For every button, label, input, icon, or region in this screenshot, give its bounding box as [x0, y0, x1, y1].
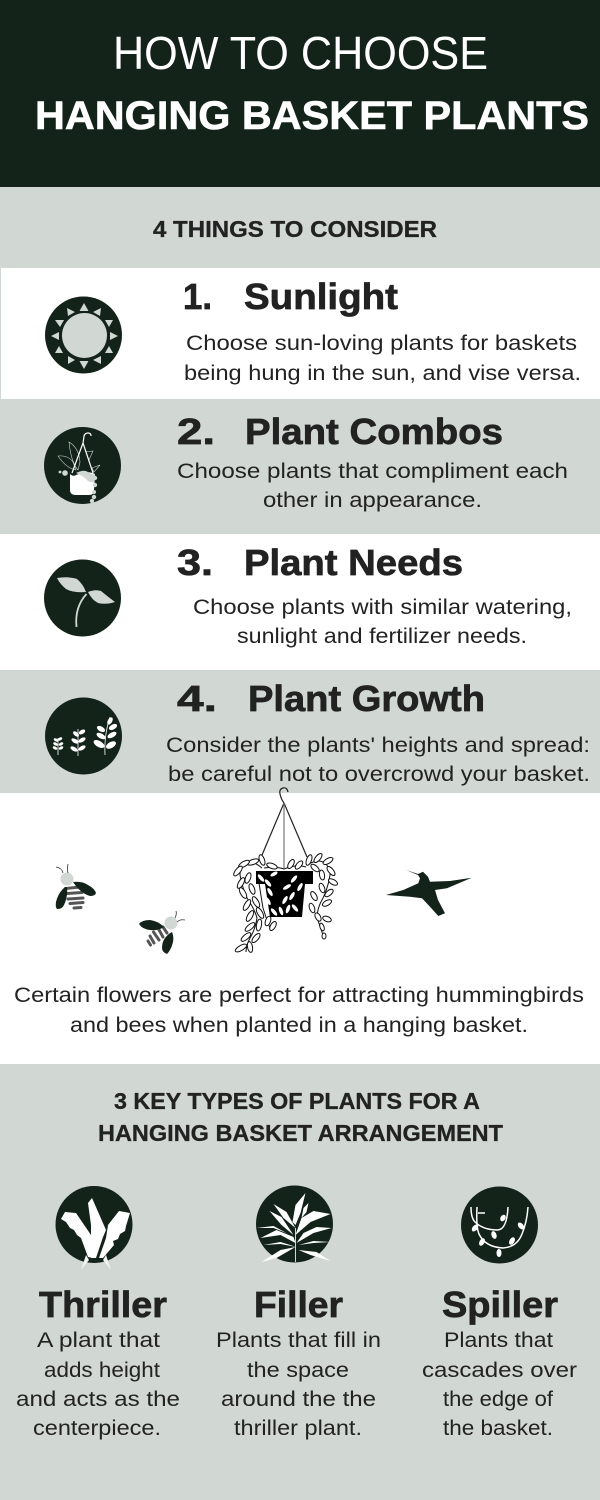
icon: vines: [461, 1186, 538, 1264]
trailing leaves: [232, 852, 339, 953]
column: spiller: [422, 1186, 577, 1440]
number 4: 4.: [177, 678, 217, 719]
column: filler: [216, 1186, 381, 1440]
panel: 3 plant needs: [0, 534, 600, 670]
heading: 3 key types: [98, 1088, 503, 1146]
text: plant needs body: [193, 596, 572, 648]
pot: [256, 871, 313, 917]
text: plant growth body: be careful not to overcrowd your basket.: [168, 763, 590, 786]
text: pollinator note: Certain flowers are perfect for attracting hummingbirds: [14, 984, 584, 1007]
text: spiller body: the basket.: [443, 1417, 553, 1440]
title line 1: HOW TO CHOOSE: [113, 27, 488, 79]
text: thriller body: centerpiece.: [33, 1417, 161, 1440]
panel: header: [0, 0, 600, 187]
number 3: 3.: [177, 542, 213, 583]
heading: filler: Filler: [254, 1284, 343, 1325]
heading: sunlight: Sunlight: [244, 276, 398, 317]
text: sunlight body: Choose sun-loving plants for baskets: [186, 332, 577, 355]
text: plant combos body: Choose plants that compliment each: [177, 460, 568, 483]
panel: subheading band: [0, 187, 600, 268]
stems: [240, 861, 330, 952]
number 1: 1.: [183, 276, 212, 317]
icon: bee right: [139, 911, 185, 954]
text: sunlight body: being hung in the sun, and vise versa.: [184, 362, 581, 385]
text: plant needs body: sunlight and fertilizer needs.: [237, 625, 527, 648]
text: filler body: around the the: [221, 1388, 376, 1411]
hanger: [262, 788, 307, 868]
title line 2: HANGING BASKET PLANTS: [35, 94, 589, 138]
heading: plant needs: Plant Needs: [244, 542, 463, 583]
text: spiller body: cascades over: [422, 1359, 577, 1382]
panel: 4 plant growth: [0, 670, 600, 793]
text: spiller body: [422, 1329, 577, 1440]
text: thriller body: adds height: [44, 1359, 160, 1382]
icon: hummingbird: [386, 870, 472, 916]
text: pollinator note: and bees when planted in a hanging basket.: [70, 1014, 528, 1037]
heading: thriller: Thriller: [39, 1284, 167, 1325]
text: thriller body: and acts as the: [16, 1388, 180, 1411]
text: sunlight body: [184, 332, 581, 385]
text: filler body: the space: [247, 1359, 349, 1382]
panel: pollinators: [0, 788, 600, 1064]
panel: 1 sunlight: [0, 268, 600, 399]
icon: seedling: [44, 560, 121, 636]
icon: bee left: [56, 864, 96, 909]
text: thriller body: [16, 1329, 180, 1440]
icon: sun: [45, 296, 122, 374]
icon: filler plant: [256, 1186, 333, 1262]
text: plant combos body: other in appearance.: [263, 489, 482, 512]
column: thriller: [16, 1186, 180, 1440]
text: plant growth body: [166, 734, 590, 786]
text: filler body: [216, 1329, 381, 1440]
text: filler body: Plants that fill in: [216, 1329, 381, 1352]
icon: hanging basket: [232, 788, 339, 953]
heading: 4 things to consider: 4 THINGS TO CONSIDER: [153, 216, 437, 242]
panel: 2 plant combos: [0, 399, 600, 534]
icon: banana leaves: [56, 1186, 132, 1270]
text: pollinator note: [14, 984, 584, 1037]
leaves on pot: [257, 870, 304, 917]
text: plant needs body: Choose plants with similar watering,: [193, 596, 572, 619]
heading: 3 key types: HANGING BASKET ARRANGEMENT: [98, 1120, 503, 1146]
heading: plant combos: Plant Combos: [245, 411, 503, 452]
text: thriller body: A plant that: [37, 1329, 160, 1352]
icon: hanging pot: [44, 427, 121, 504]
heading: spiller: Spiller: [442, 1284, 558, 1325]
text: plant combos body: [177, 460, 568, 512]
number 2: 2.: [177, 411, 215, 452]
heading: 3 key types: 3 KEY TYPES OF PLANTS FOR A: [114, 1088, 480, 1114]
text: plant growth body: Consider the plants' heights and spread:: [166, 734, 590, 757]
icon: growing sprigs: [45, 698, 122, 774]
panel: plant types: [0, 1064, 600, 1500]
text: filler body: thriller plant.: [234, 1417, 362, 1440]
text: spiller body: Plants that: [444, 1329, 553, 1352]
text: spiller body: the edge of: [443, 1388, 553, 1411]
heading: plant growth: Plant Growth: [248, 678, 485, 719]
